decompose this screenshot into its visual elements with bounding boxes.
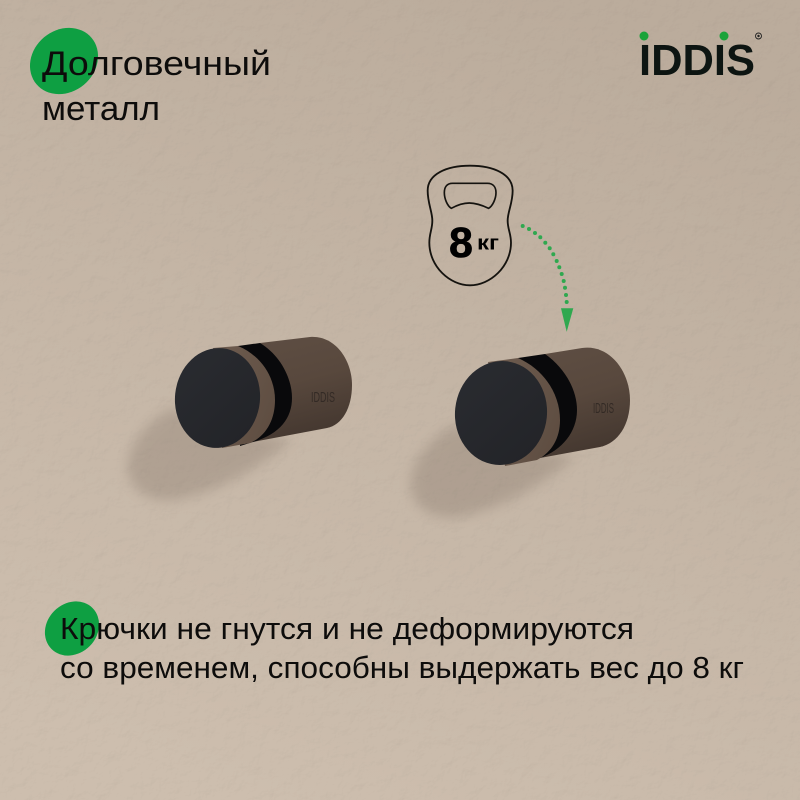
caption: со временем, способны выдержать вес до 8 кг [60,650,744,685]
caption [60,611,744,685]
heading: металл [42,90,160,128]
icon: kettlebell 8 kg [428,166,513,285]
icon: kettlebell 8 kg: кг [477,232,499,254]
hook: right: IDDIS [593,400,614,417]
hook: left [128,337,352,501]
badge: green circle behind caption [34,590,110,667]
caption: Крючки не гнутся и не деформируются [60,611,634,646]
heading [42,45,271,128]
logo: IDDIS: IDDIS [639,36,755,85]
hook: right [411,348,630,518]
hook: left: IDDIS [311,389,335,406]
icon: kettlebell 8 kg: 8 [449,219,473,267]
badge: green circle behind heading [16,14,112,108]
heading: Долговечный [42,45,271,83]
arrow: dotted green arrow down to hook [521,224,573,332]
